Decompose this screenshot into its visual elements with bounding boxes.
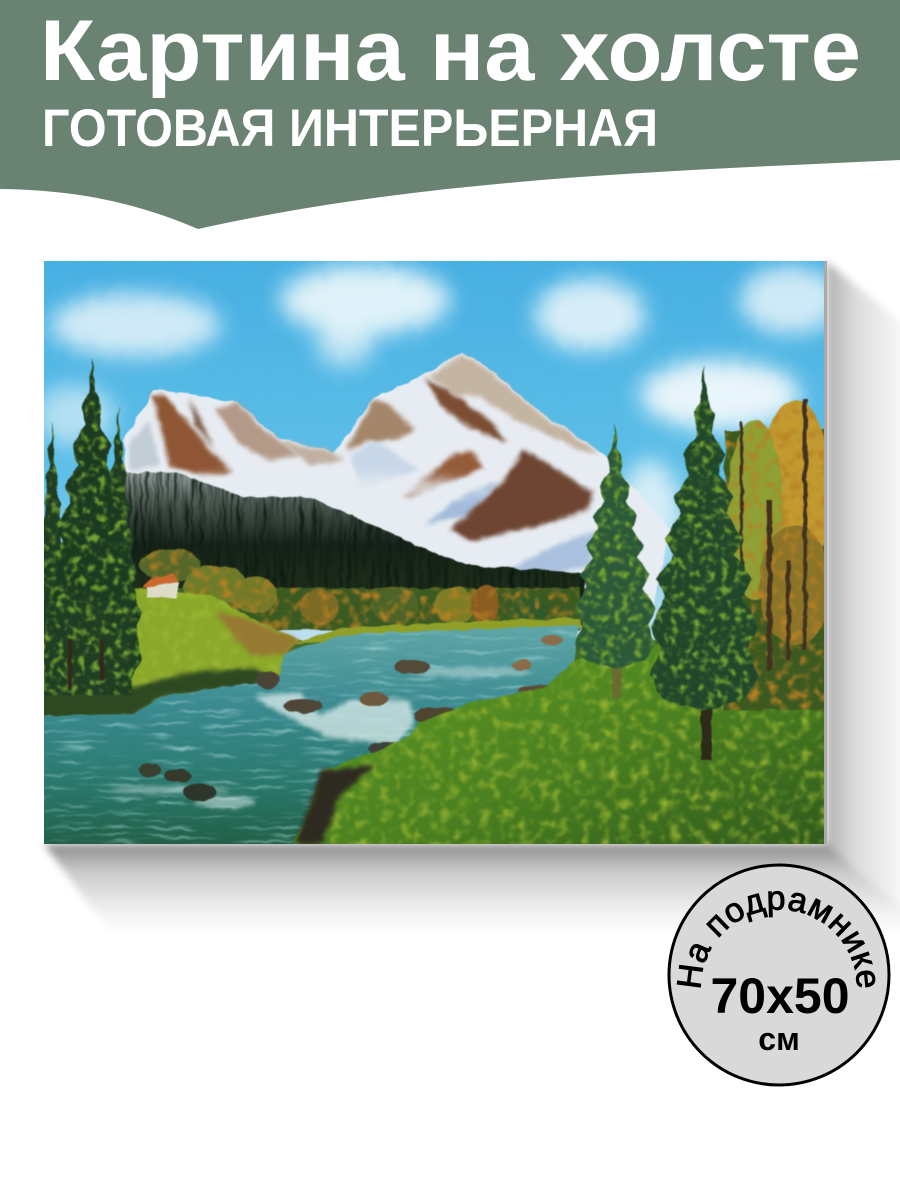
autumn treeline (135, 549, 580, 630)
right fir (699, 708, 714, 760)
badge unit: см (758, 1021, 800, 1057)
mountains (124, 352, 670, 620)
header banner (0, 0, 900, 229)
canvas painting (44, 261, 824, 844)
rock: left massif (152, 395, 232, 476)
dark forest (124, 472, 590, 625)
middle fir (611, 668, 622, 699)
badge size: 70x50 (710, 968, 850, 1024)
left trunks (68, 640, 104, 690)
badge curved text: На подрамнике (676, 890, 876, 988)
subtitle: ГОТОВАЯ ИНТЕРЬЕРНАЯ (42, 99, 658, 158)
clouds (35, 265, 840, 560)
bank rock (296, 766, 375, 844)
mist (110, 474, 490, 502)
blue snow shade (350, 442, 418, 484)
rapids (110, 667, 530, 808)
river (30, 625, 579, 860)
canvas shadow (44, 261, 900, 935)
rock: main peak (345, 400, 415, 452)
left firs (36, 358, 142, 695)
sky (44, 261, 824, 642)
back trunks (740, 400, 807, 670)
far bank (290, 618, 582, 645)
title: Картина на холсте (40, 3, 861, 99)
fir trees (36, 358, 758, 760)
rocks (138, 635, 596, 801)
right meadow (294, 644, 824, 844)
painting base (112, 639, 660, 834)
badge (668, 864, 890, 1086)
canvas edge (824, 261, 827, 844)
left meadow (30, 588, 300, 720)
autumn trees right (725, 400, 835, 710)
house (142, 573, 178, 598)
